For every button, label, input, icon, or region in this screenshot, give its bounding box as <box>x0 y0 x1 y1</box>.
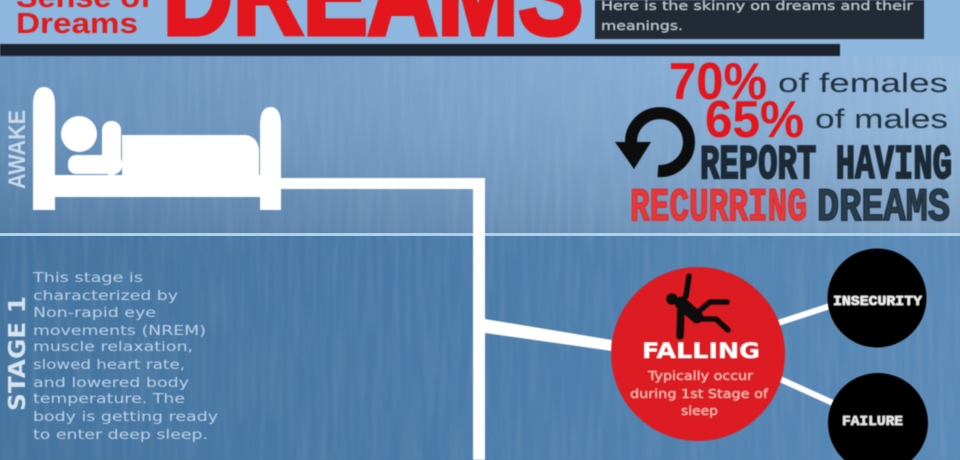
background: top band <box>0 0 960 57</box>
text: RECURRING: RECURRING <box>630 182 807 234</box>
label: FALLING: FALLING <box>642 339 760 363</box>
text: stage 1 description: and lowered body <box>33 376 189 391</box>
text: stage 1 description: body is getting ready <box>33 410 218 425</box>
connector line: bed to falling <box>275 178 612 460</box>
background: awake section shading <box>0 56 960 234</box>
label: AWAKE: AWAKE <box>4 110 31 189</box>
node: failure: FAILURE <box>842 414 903 430</box>
stat: 70% of females: 70% <box>669 53 767 111</box>
text: stage 1 description: characterized by <box>33 289 178 304</box>
stat: 65% of males: of males <box>815 104 948 134</box>
text: falling description: Typically occur <box>647 368 754 383</box>
text: stage 1 description: temperature. The <box>33 392 185 407</box>
icon: bed with sleeper <box>33 87 281 210</box>
stat: 70% of females: of females <box>778 68 948 98</box>
text: falling description: sleep <box>681 403 718 418</box>
text: stage 1 description: muscle relaxation, <box>33 340 193 355</box>
text: stage 1 description: movements (NREM) <box>33 324 206 339</box>
node: insecurity <box>828 248 926 348</box>
label: STAGE 1: STAGE 1 <box>5 296 31 411</box>
stat: 70% of females <box>669 53 948 111</box>
background: stage 1 section <box>0 234 960 460</box>
icon: falling person <box>666 276 728 336</box>
node: falling <box>611 267 785 441</box>
text: stage 1 description <box>32 271 218 443</box>
subtitle: Sense of Dreams: Dreams <box>16 8 138 40</box>
text: falling description <box>630 368 769 418</box>
text: stage 1 description: This stage is <box>32 271 143 286</box>
section divider <box>0 233 960 236</box>
intro box <box>595 0 924 39</box>
node: insecurity: INSECURITY <box>833 294 923 310</box>
header <box>0 0 924 60</box>
stat: 65% of males <box>705 91 948 149</box>
text: falling description: during 1st Stage of <box>630 386 769 401</box>
text: stage 1 description: to enter deep sleep. <box>33 428 208 443</box>
icon: recurring arrow <box>615 113 689 171</box>
connector lines: falling to meanings <box>778 306 833 403</box>
header bar <box>0 44 840 56</box>
background: awake section <box>0 56 960 234</box>
subtitle: Sense of Dreams <box>16 0 151 40</box>
text: stage 1 description: slowed heart rate, <box>33 358 185 373</box>
node: failure <box>828 373 928 460</box>
stat: 65% of males: 65% <box>705 91 804 149</box>
statistics block <box>615 53 952 234</box>
intro box: meanings. <box>601 18 683 33</box>
text: stage 1 description: Non-rapid eye <box>33 306 156 321</box>
